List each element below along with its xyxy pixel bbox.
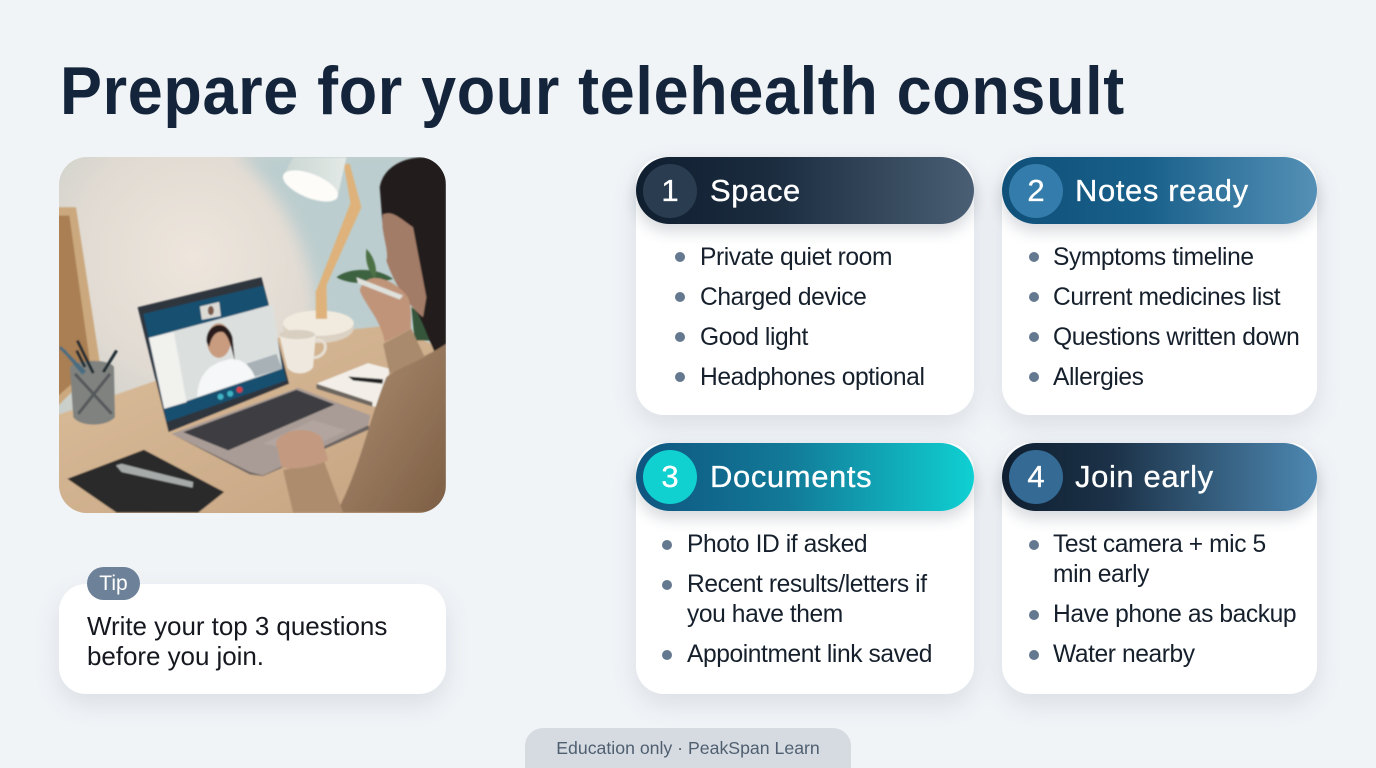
checklist: documents: Appointment link saved bbox=[687, 641, 932, 668]
number badge 1 bbox=[643, 164, 697, 218]
number badge 4: 4 bbox=[1027, 459, 1045, 494]
heading: notes ready: Notes ready bbox=[1075, 173, 1249, 208]
checklist: space: Good light bbox=[700, 324, 808, 351]
panel: notes ready bbox=[1002, 157, 1317, 415]
remote doctor on screen bbox=[197, 359, 255, 397]
checklist: notes ready: Allergies bbox=[1053, 364, 1144, 391]
header: notes ready bbox=[1002, 157, 1317, 224]
number badge 4 bbox=[1009, 450, 1063, 504]
person face bbox=[382, 213, 426, 317]
wall bbox=[50, 151, 450, 517]
panel: join early bbox=[1002, 443, 1317, 694]
laptop lid bbox=[138, 277, 289, 432]
panel: documents bbox=[636, 443, 974, 694]
number badge 3 bbox=[643, 450, 697, 504]
laptop screen bbox=[143, 286, 286, 422]
tip card bbox=[59, 584, 446, 694]
desk bbox=[57, 326, 446, 517]
checklist: notes ready: Questions written down bbox=[1053, 324, 1299, 351]
number badge 3: 3 bbox=[661, 459, 679, 494]
tip text bbox=[87, 611, 387, 671]
plant bbox=[336, 270, 393, 283]
checklist: notes ready: Current medicines list bbox=[1053, 284, 1280, 311]
notepad and pen bbox=[316, 363, 390, 406]
heading: space: Space bbox=[710, 173, 801, 208]
checklist: space: Charged device bbox=[700, 284, 866, 311]
checklist: join early bbox=[1029, 531, 1296, 668]
checklist: documents: you have them bbox=[687, 601, 843, 628]
checklist: notes ready bbox=[1029, 244, 1299, 391]
checklist: join early: Have phone as backup bbox=[1053, 601, 1296, 628]
header: join early bbox=[1002, 443, 1317, 511]
hands bbox=[276, 430, 328, 468]
mug bbox=[279, 330, 316, 373]
call controls bbox=[218, 394, 224, 400]
laptop base bbox=[172, 388, 370, 475]
number badge 2 bbox=[1009, 164, 1063, 218]
number badge 1: 1 bbox=[661, 173, 679, 208]
notebook and pen on desk bbox=[67, 450, 224, 513]
lamp base and arm bbox=[283, 313, 354, 343]
header: space bbox=[636, 157, 974, 224]
checklist: join early: min early bbox=[1053, 561, 1149, 588]
checklist: join early: Water nearby bbox=[1053, 641, 1195, 668]
heading: documents: Documents bbox=[710, 459, 872, 494]
panel: space bbox=[636, 157, 974, 415]
photo: person on telehealth video call at desk bbox=[59, 157, 446, 513]
tip text: before you join. bbox=[87, 641, 264, 671]
pen holder bbox=[70, 361, 115, 425]
checklist: documents: Photo ID if asked bbox=[687, 531, 867, 558]
cork board bbox=[57, 207, 100, 407]
tip badge: Tip bbox=[99, 572, 128, 595]
tip badge bbox=[87, 567, 140, 600]
checklist: notes ready: Symptoms timeline bbox=[1053, 244, 1254, 271]
tip text: Write your top 3 questions bbox=[87, 611, 387, 641]
footer pill bbox=[525, 728, 851, 768]
footer pill: Education only · PeakSpan Learn bbox=[556, 738, 820, 758]
self-view thumbnail bbox=[200, 302, 221, 320]
title: Prepare for your telehealth consult bbox=[60, 53, 1125, 129]
number badge 2: 2 bbox=[1027, 173, 1045, 208]
lamp shade bbox=[284, 157, 346, 197]
checklist: space bbox=[675, 244, 924, 391]
checklist: space: Headphones optional bbox=[700, 364, 924, 391]
checklist: join early: Test camera + mic 5 bbox=[1053, 531, 1266, 558]
checklist: space: Private quiet room bbox=[700, 244, 892, 271]
checklist: documents bbox=[662, 531, 932, 668]
checklist: documents: Recent results/letters if bbox=[687, 571, 927, 598]
heading: join early: Join early bbox=[1075, 459, 1214, 494]
person hair bbox=[380, 157, 446, 370]
person sweater bbox=[336, 344, 446, 513]
header: documents bbox=[636, 443, 974, 511]
